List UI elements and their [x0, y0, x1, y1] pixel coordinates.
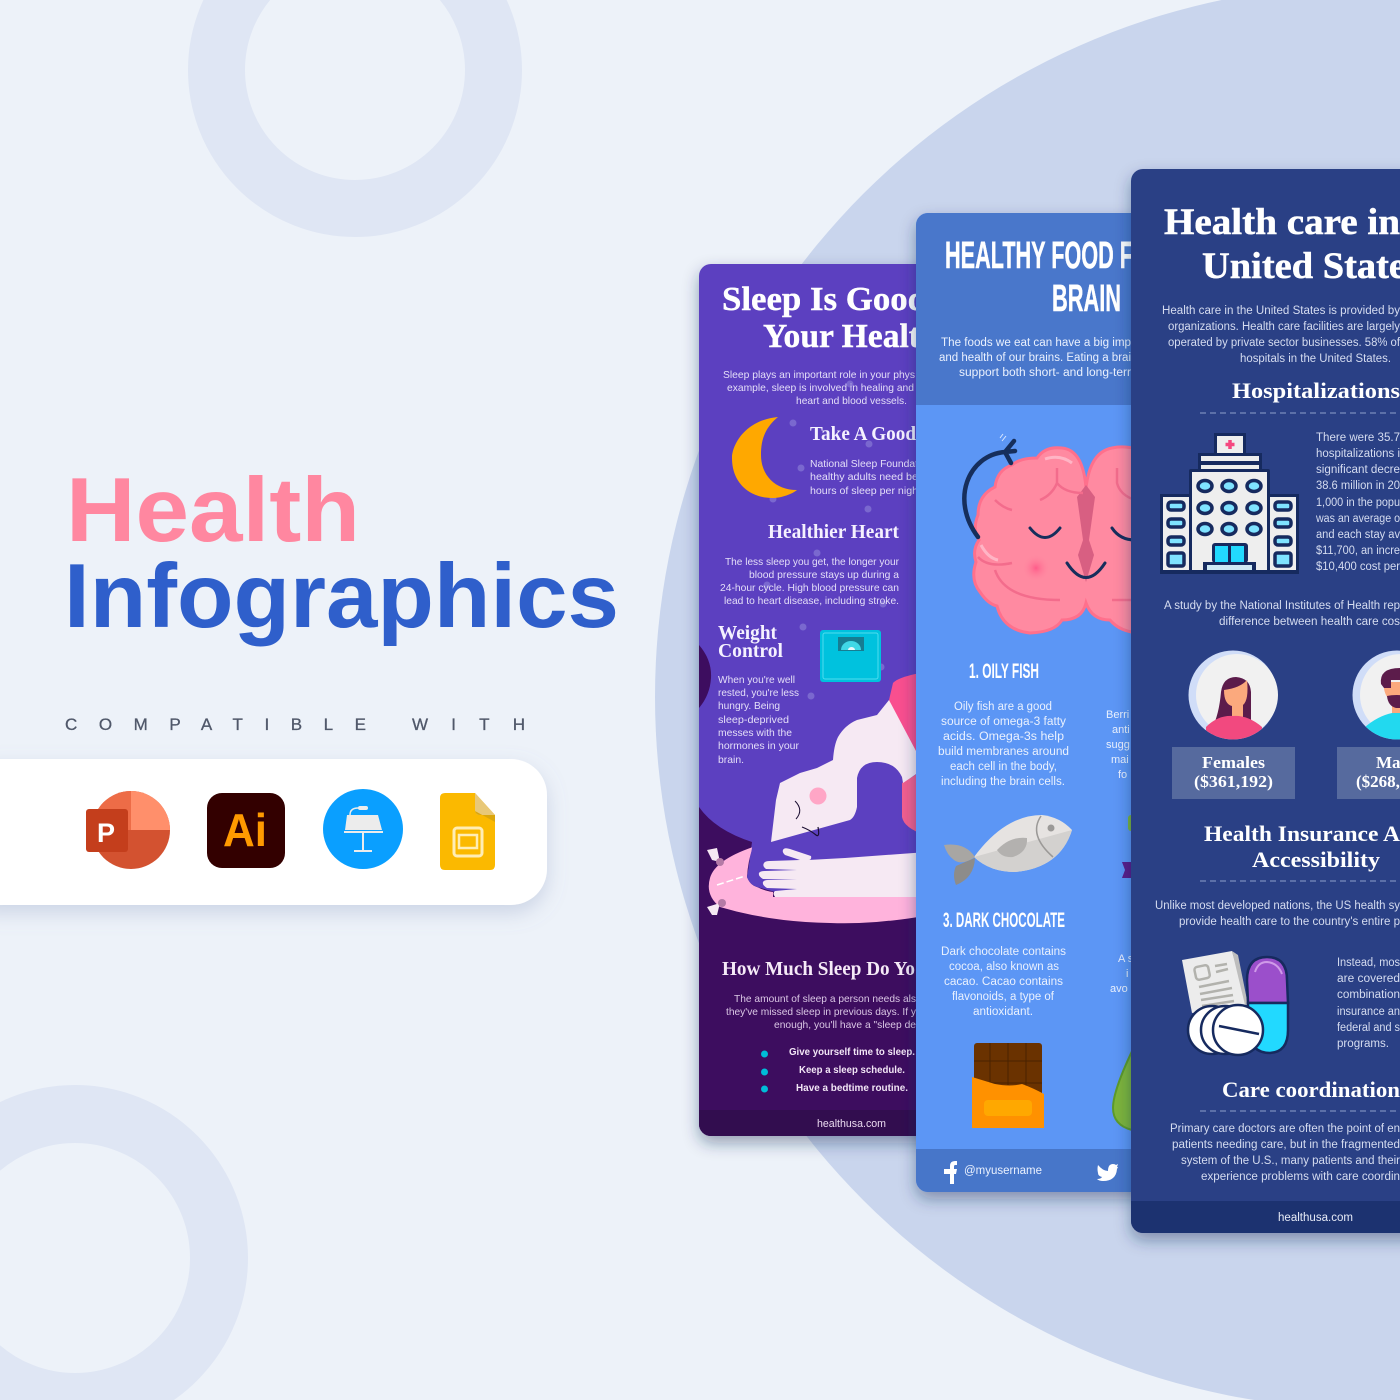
footer band — [916, 1149, 1131, 1192]
sleeve behind hand — [747, 847, 792, 892]
section: weight control — [718, 622, 800, 766]
avatar: female — [1188, 650, 1278, 745]
intro text — [1162, 305, 1400, 365]
lower pink hair — [902, 774, 916, 832]
section: healthier heart — [720, 521, 899, 607]
study text: difference between health care cos — [1219, 616, 1400, 628]
care text: Primary care doctors are often the point of en — [1170, 1123, 1400, 1135]
icon: Keynote — [323, 789, 403, 869]
compatible with label: WITH — [412, 715, 525, 734]
intro text: operated by private sector businesses. 58% of — [1168, 337, 1400, 349]
title: Infographics — [64, 546, 619, 647]
section: take a good: National Sleep Foundat — [810, 459, 918, 470]
icon: Google Slides — [440, 793, 495, 870]
section: oily fish: source of omega-3 fatty — [941, 716, 1066, 728]
section: weight control: Control — [718, 640, 783, 662]
care text — [1170, 1123, 1400, 1183]
heading: sleep: Your Healt — [763, 318, 921, 355]
section: how much sleep: enough, you'll have a "sleep de — [774, 1019, 916, 1031]
right column fragments: mai — [1111, 754, 1129, 766]
username: @myusername — [964, 1165, 1042, 1177]
heading: care coordination: Care coordination — [1222, 1077, 1400, 1102]
header band — [916, 213, 1131, 405]
intro text: example, sleep is involved in healing and — [727, 382, 914, 394]
icon: pills and document — [1182, 951, 1288, 1055]
icon: hospital — [1160, 433, 1299, 574]
heading: sleep — [724, 286, 916, 348]
software card — [0, 759, 547, 905]
hospitalizations text: There were 35.7 — [1316, 432, 1400, 444]
section: weight control: rested, you're less — [718, 687, 799, 699]
section: take a good: healthy adults need be — [810, 472, 918, 483]
section: oily fish — [938, 660, 1069, 788]
hospitalizations text — [1315, 432, 1400, 573]
heading: hospitalizations: Hospitalizations — [1232, 378, 1400, 403]
right column fragments: i — [1126, 968, 1128, 980]
heading: brain food: BRAIN — [1052, 278, 1121, 320]
pink hair — [889, 674, 916, 751]
intro text: hospitals in the United States. — [1240, 353, 1391, 365]
closed eye — [795, 801, 800, 819]
section: weight control: hungry. Being — [718, 700, 780, 712]
panel: US health care infographic — [1131, 169, 1400, 1233]
illustration: chocolate bar — [972, 1043, 1044, 1128]
icon: PowerPoint: P — [97, 818, 115, 848]
compatible with label: COMPATIBLE — [65, 715, 366, 734]
checklist — [761, 1047, 915, 1094]
section: healthier heart: The less sleep you get, the longer your — [725, 556, 899, 568]
pills text: are covered — [1337, 973, 1400, 985]
dark wave background — [699, 645, 916, 1136]
pills text — [1337, 957, 1400, 1050]
intro text: Sleep plays an important role in your phys — [723, 369, 915, 381]
section: oily fish: Oily fish are a good — [954, 701, 1052, 713]
mouth — [802, 827, 819, 836]
section: oily fish: including the brain cells. — [941, 776, 1065, 788]
avatar: male — [1352, 650, 1400, 745]
right column fragments: A s — [1118, 953, 1134, 965]
section: healthier heart: Healthier Heart — [768, 521, 899, 543]
right column fragments: avo — [1110, 983, 1128, 995]
hand and arm — [758, 848, 916, 897]
hospitalizations text: significant decre — [1316, 464, 1400, 476]
insurance text — [1155, 900, 1400, 928]
section: weight control: messes with the — [718, 727, 792, 739]
section: how much sleep — [722, 958, 917, 1031]
section: dark chocolate: antioxidant. — [973, 1006, 1033, 1018]
cheek — [810, 788, 826, 804]
care text: system of the U.S., many patients and their — [1181, 1155, 1400, 1167]
large background circle — [655, 0, 1400, 1400]
section: take a good: hours of sleep per nigh — [810, 486, 918, 497]
section: dark chocolate — [941, 909, 1066, 1018]
heading: health care: Health care in — [1164, 202, 1400, 243]
title — [64, 460, 619, 647]
section: weight control: Weight — [718, 622, 777, 644]
intro text: The foods we eat can have a big imp — [941, 337, 1131, 349]
footer band — [699, 1110, 939, 1136]
heading: insurance — [1204, 821, 1400, 872]
checklist: Have a bedtime routine. — [796, 1083, 908, 1094]
section: dark chocolate: cacao. Cacao contains — [944, 976, 1063, 988]
right column fragments: sugg — [1106, 739, 1130, 751]
label: females: ($361,192) — [1194, 772, 1273, 791]
panel: brain food infographic — [916, 213, 1156, 1192]
care text: experience problems with care coordin — [1201, 1171, 1400, 1183]
heading: insurance: Accessibility — [1252, 847, 1380, 872]
label: males: ($268, — [1356, 772, 1400, 791]
section: oily fish: acids. Omega-3s help — [943, 731, 1064, 743]
section: how much sleep: The amount of sleep a person needs als — [734, 993, 916, 1005]
right column fragments: anti — [1112, 724, 1130, 736]
label: males — [1337, 747, 1400, 799]
section: weight control: When you're well — [718, 674, 795, 686]
insurance text: Unlike most developed nations, the US health sy — [1155, 900, 1400, 912]
heading: health care: United State — [1202, 246, 1400, 287]
heading: brain food: HEALTHY FOOD F — [945, 235, 1133, 277]
label: females — [1172, 747, 1295, 799]
title: Health — [66, 460, 360, 561]
section: healthier heart: lead to heart disease, including stroke. — [724, 595, 899, 607]
right column fragments — [1106, 710, 1131, 992]
panel: sleep infographic — [688, 260, 916, 1154]
illustration: fish — [944, 815, 1072, 885]
intro text — [724, 370, 915, 404]
section: weight control: sleep-deprived — [718, 714, 789, 726]
heading: sleep: Sleep Is Good — [722, 281, 927, 318]
right column illustrations — [1112, 815, 1131, 1131]
heading: insurance: Health Insurance A — [1204, 821, 1400, 846]
hospitalizations text: 38.6 million in 20 — [1316, 480, 1400, 492]
intro text: Health care in the United States is provided by — [1162, 305, 1400, 317]
section: dark chocolate: Dark chocolate contains — [941, 946, 1066, 958]
pills text: combination — [1337, 989, 1400, 1001]
heading: brain food — [946, 241, 1131, 312]
section: weight control: brain. — [718, 754, 744, 766]
section: take a good — [810, 423, 918, 497]
illustration: sleeping woman — [707, 674, 916, 924]
footer url: healthusa.com — [1278, 1212, 1353, 1224]
icon: scale — [820, 630, 881, 682]
section: dark chocolate: flavonoids, a type of — [952, 991, 1055, 1003]
hospitalizations text: hospitalizations i — [1316, 448, 1400, 460]
footer band — [1131, 1201, 1400, 1233]
pillow — [708, 847, 916, 924]
right column fragments: fo — [1118, 769, 1127, 781]
section: how much sleep: How Much Sleep Do Yo — [722, 958, 915, 980]
icon: Illustrator — [207, 793, 285, 868]
icon: facebook — [944, 1161, 957, 1184]
face and hair — [771, 700, 925, 842]
pills text: programs. — [1337, 1038, 1389, 1050]
icon: PowerPoint — [86, 791, 170, 869]
section: weight control: hormones in your — [718, 740, 800, 752]
right column fragments: Berri — [1106, 709, 1129, 721]
compatible with label — [65, 715, 525, 734]
section: dark chocolate: cocoa, also known as — [949, 961, 1059, 973]
checklist: Give yourself time to sleep. — [789, 1047, 915, 1058]
section: oily fish: 1. OILY FISH — [969, 660, 1039, 683]
hospitalizations text: $10,400 cost per — [1316, 561, 1400, 573]
icon: moon — [732, 417, 797, 498]
section: healthier heart: blood pressure stays up during a — [749, 569, 899, 581]
pillow bows — [707, 848, 720, 915]
section: how much sleep: they've missed sleep in previous days. If y — [726, 1006, 917, 1018]
heading: health care — [1164, 202, 1400, 287]
label: females: Females — [1202, 753, 1265, 772]
intro text: organizations. Health care facilities are largely — [1168, 321, 1400, 333]
study text — [1164, 600, 1400, 628]
floating dots — [764, 380, 886, 700]
intro text: heart and blood vessels. — [796, 395, 907, 407]
insurance text: provide health care to the country's entire p — [1179, 916, 1400, 928]
illustration: brain — [964, 434, 1140, 633]
section: take a good: Take A Good — [810, 423, 916, 445]
section: dark chocolate: 3. DARK CHOCOLATE — [943, 909, 1065, 932]
footer url: healthusa.com — [817, 1118, 886, 1130]
checklist: Keep a sleep schedule. — [799, 1065, 905, 1076]
intro text: and health of our brains. Eating a brai — [939, 352, 1131, 364]
section: oily fish: each cell in the body, — [950, 761, 1057, 773]
intro text — [939, 337, 1131, 379]
intro text: support both short- and long-terr — [959, 367, 1131, 379]
decorative ring top — [216, 0, 494, 208]
section: oily fish: build membranes around — [938, 746, 1069, 758]
section: healthier heart: 24-hour cycle. High blood pressure can — [720, 582, 899, 594]
icon: Illustrator: Ai — [223, 804, 267, 856]
study text: A study by the National Institutes of Health rep — [1164, 600, 1400, 612]
decorative ring bottom — [0, 1114, 219, 1400]
care text: patients needing care, but in the fragmented — [1172, 1139, 1400, 1151]
icon: twitter — [1097, 1164, 1118, 1181]
